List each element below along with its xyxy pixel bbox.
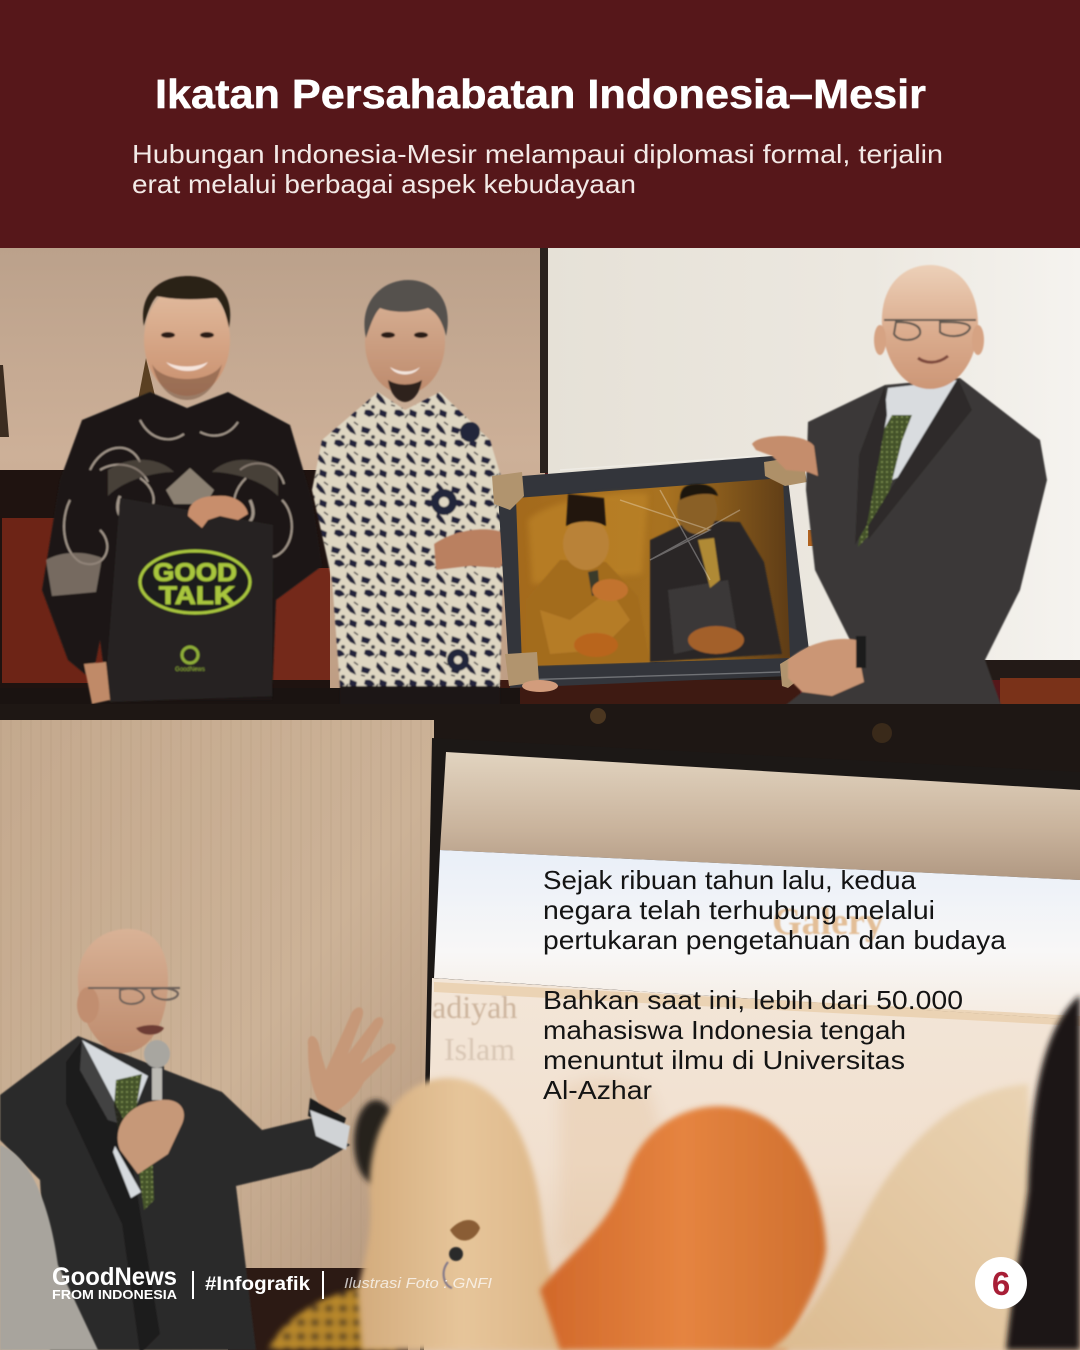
tote bag: GoodNews xyxy=(175,667,205,673)
head xyxy=(143,276,230,400)
header band xyxy=(0,0,1080,248)
body text: menuntut ilmu di Universitas xyxy=(543,1045,905,1075)
head xyxy=(364,280,448,402)
audience: dark hair and batik shoulder xyxy=(268,1100,398,1350)
painting wrapped in plastic xyxy=(492,455,816,688)
tote bag xyxy=(106,498,273,702)
body text: pertukaran pengetahuan dan budaya xyxy=(543,925,1007,955)
subtitle xyxy=(132,139,943,199)
footer branding xyxy=(52,1263,492,1302)
photo: speaker in front of projection screen: Galery xyxy=(772,901,884,943)
logo: GoodNews from Indonesia: GoodNews xyxy=(52,1263,177,1291)
audience: beige hijab xyxy=(358,1078,567,1350)
body text: mahasiswa Indonesia tengah xyxy=(543,1015,906,1045)
logo: GoodNews from Indonesia: FROM INDONESIA xyxy=(52,1287,178,1302)
body text: Al-Azhar xyxy=(543,1075,652,1105)
subtitle: erat melalui berbagai aspek kebudayaan xyxy=(132,169,636,199)
raised hand xyxy=(308,1007,396,1112)
microphone xyxy=(144,1040,170,1101)
body text: negara telah terhubung melalui xyxy=(543,895,935,925)
audience: hijab knot xyxy=(444,1220,480,1288)
hashtag: #Infografik xyxy=(205,1274,310,1295)
speaker xyxy=(0,929,396,1350)
photo: handover of painting xyxy=(0,248,1080,708)
audience: cream hijab xyxy=(770,1084,1038,1350)
logo: GoodNews from Indonesia xyxy=(52,1263,178,1302)
audience: grey hijab xyxy=(0,1145,98,1350)
audience: dark figure xyxy=(1006,995,1080,1350)
head xyxy=(874,265,984,389)
photo credit: Ilustrasi Foto : GNFI xyxy=(344,1275,492,1292)
audience: orange hijab xyxy=(540,1106,826,1350)
photo: speaker in front of projection screen: Islam xyxy=(444,1031,515,1067)
photo: speaker in front of projection screen xyxy=(0,704,1080,1350)
painted figure: man in suit xyxy=(650,484,782,662)
painted figure: officer xyxy=(526,494,650,666)
person: bald man in grey suit xyxy=(752,265,1047,708)
page number badge: 6 xyxy=(992,1265,1010,1302)
head xyxy=(77,929,180,1053)
person: man in light batik xyxy=(312,280,514,708)
photo: speaker in front of projection screen: adiyah xyxy=(432,989,517,1025)
tote bag: GOOD xyxy=(153,559,237,587)
tote bag: TALK xyxy=(159,582,235,610)
page number badge xyxy=(975,1257,1027,1309)
body text: Bahkan saat ini, lebih dari 50.000 xyxy=(543,985,963,1015)
title: Ikatan Persahabatan Indonesia–Mesir xyxy=(155,71,926,117)
cardboard corners xyxy=(492,472,524,510)
subtitle: Hubungan Indonesia-Mesir melampaui diplomasi formal, terjalin xyxy=(132,139,943,169)
body text: Sejak ribuan tahun lalu, kedua xyxy=(543,865,917,895)
body text xyxy=(543,865,1007,1105)
person: man in dark batik xyxy=(42,276,322,704)
